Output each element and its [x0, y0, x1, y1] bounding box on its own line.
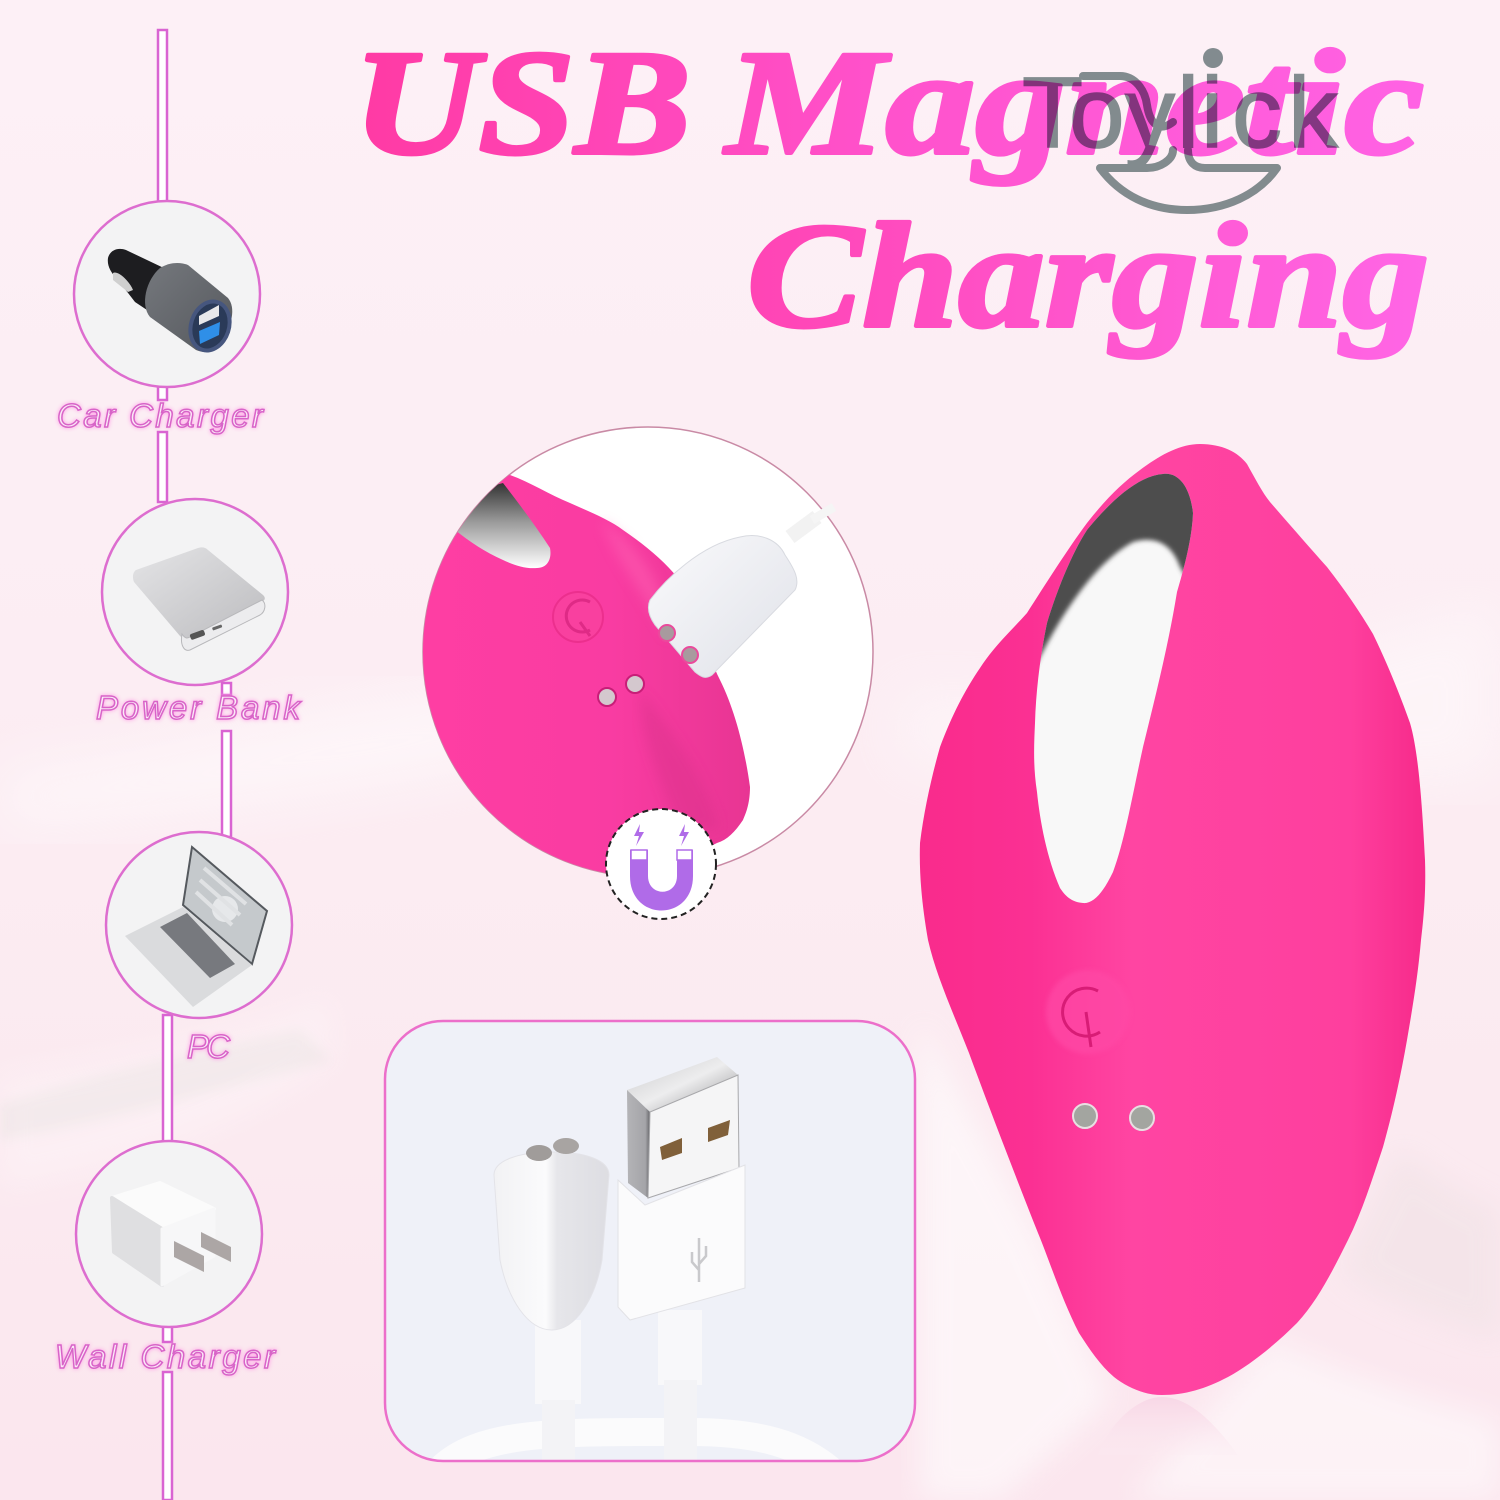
title	[353, 20, 1429, 359]
icon: power bank	[102, 499, 288, 685]
cable coil	[440, 1432, 830, 1470]
label: pc: PC	[187, 1028, 232, 1065]
title: USB	[353, 20, 691, 186]
opening	[1034, 474, 1193, 904]
title: Charging	[747, 193, 1429, 359]
detail circle: charging connection	[400, 427, 873, 900]
watermark logo	[1022, 48, 1339, 210]
icon: magnet badge	[606, 809, 716, 919]
label: power bank: Power Bank	[96, 689, 302, 726]
icon: laptop	[106, 832, 292, 1018]
main product	[920, 444, 1425, 1395]
icon: car charger	[74, 201, 260, 387]
label: wall charger: Wall Charger	[55, 1338, 277, 1375]
watermark logo: Toylick	[1022, 57, 1339, 169]
panel border	[385, 1021, 915, 1461]
usb plug	[618, 1057, 745, 1460]
connector lines	[158, 30, 231, 1500]
label: car charger: Car Charger	[57, 397, 265, 434]
power button	[1046, 970, 1130, 1054]
magnetic cable	[494, 1138, 609, 1460]
icon: wall charger	[76, 1141, 262, 1327]
panel: usb cable photo	[385, 1021, 915, 1470]
title: Magnetic	[724, 20, 1424, 186]
